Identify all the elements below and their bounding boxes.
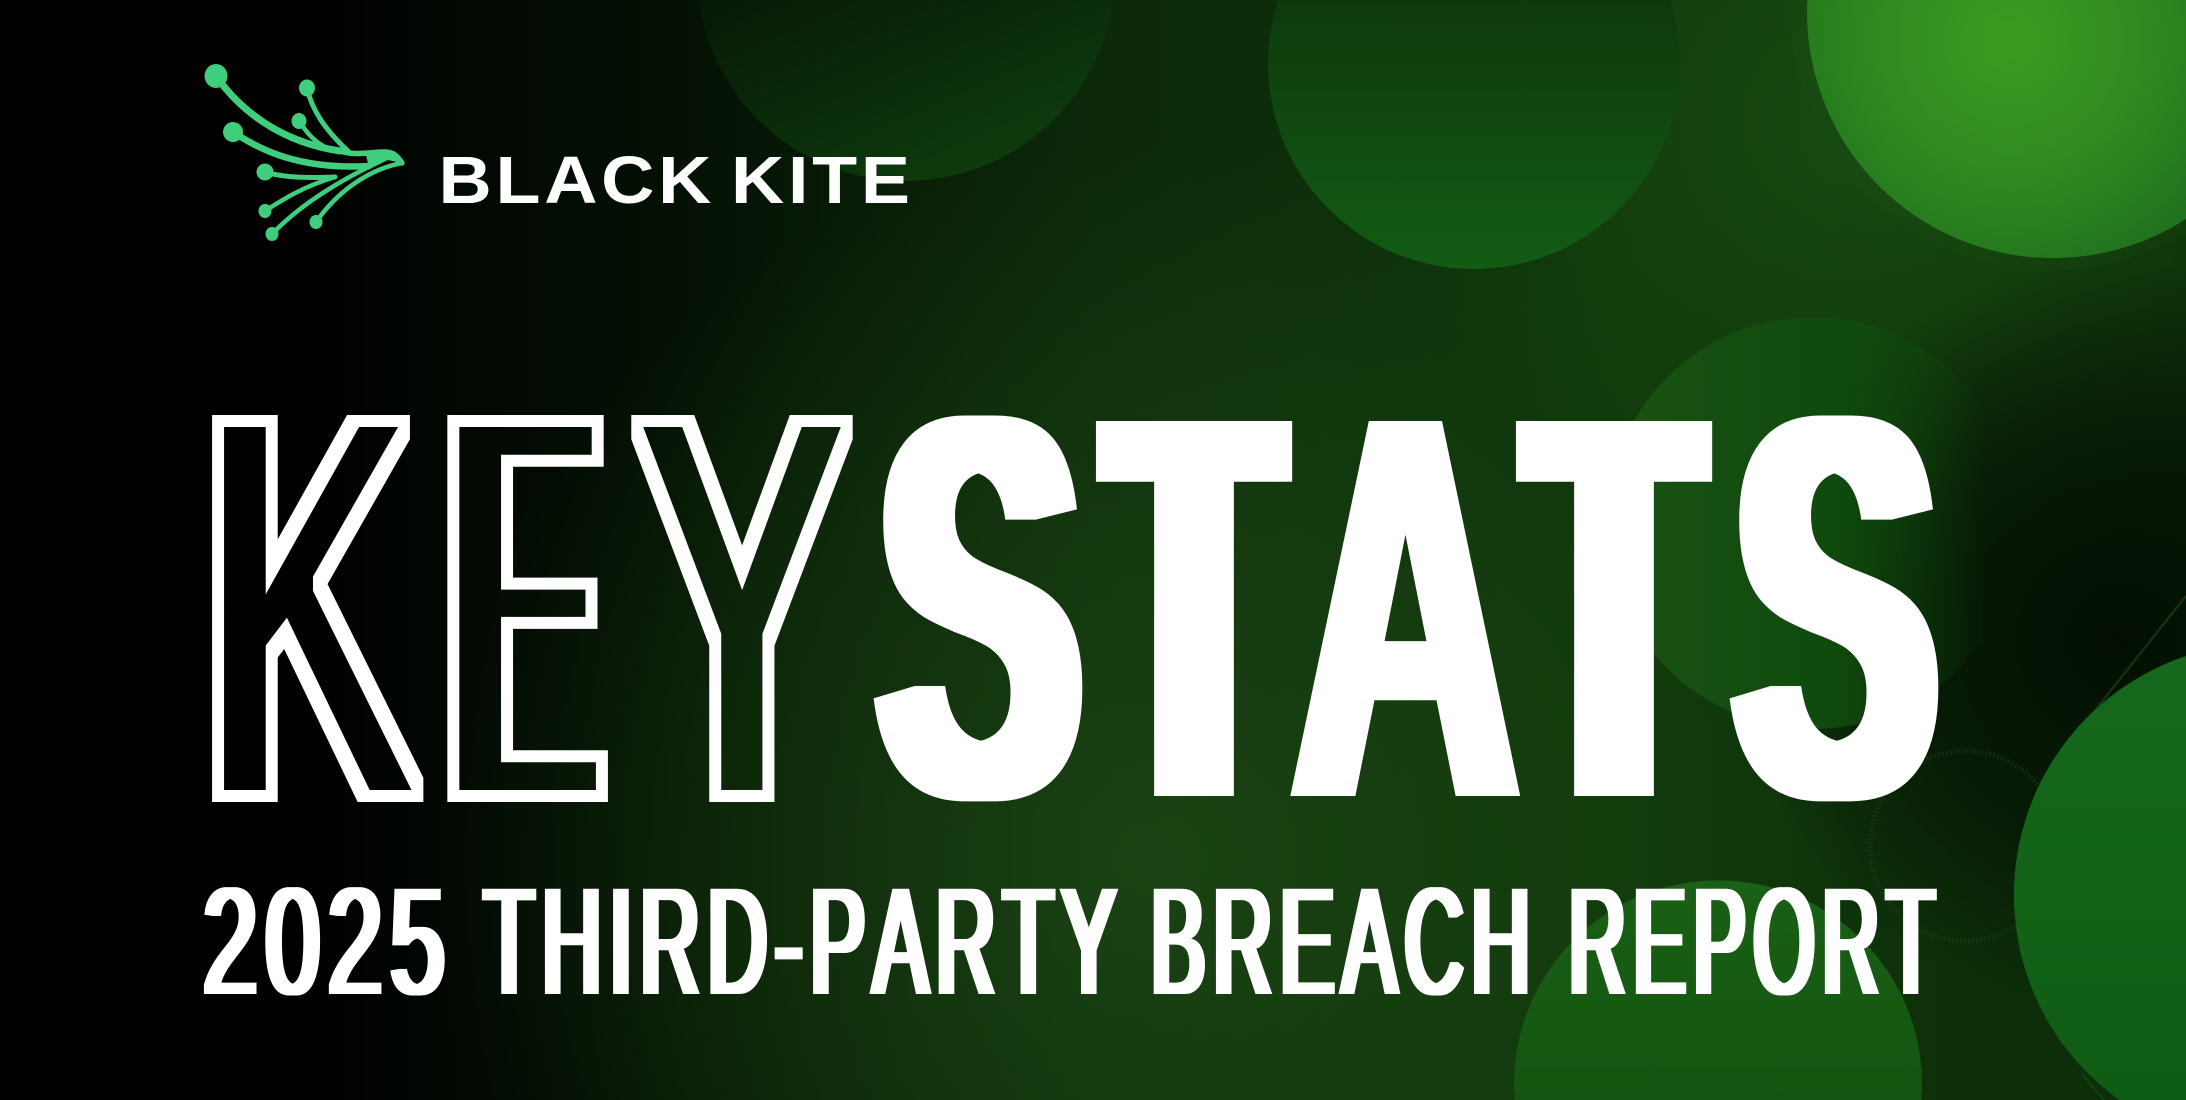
outlined word: KEY: E [453, 302, 594, 914]
subtitle: 2025 Third-Party Breach Report: BREACH [1151, 855, 1538, 1026]
solid word: STATS: S [880, 304, 1079, 912]
outlined word: KEY [204, 302, 847, 914]
wordmark: BLACK [438, 142, 715, 217]
solid word: STATS: T [1114, 304, 1274, 912]
subtitle: 2025 Third-Party Breach Report: 2025 [203, 857, 453, 1027]
wordmark [438, 142, 914, 217]
solid word: STATS: T [1534, 304, 1694, 912]
solid word: STATS: A [1292, 304, 1518, 912]
solid word: STATS [880, 304, 1935, 912]
subtitle: 2025 Third-Party Breach Report [203, 855, 1943, 1028]
subtitle: 2025 Third-Party Breach Report: THIRD-PARTY [484, 857, 1124, 1028]
subtitle: 2025 Third-Party Breach Report: REPORT [1569, 855, 1943, 1027]
wordmark: KITE [731, 142, 914, 217]
title: KEY STATS [204, 302, 1935, 914]
outlined word: KEY: K [204, 302, 416, 914]
outlined word: KEY: Y [637, 302, 847, 914]
decorative green circles [699, 0, 2186, 1100]
solid word: STATS: S [1736, 304, 1935, 912]
logo: Black Kite [204, 64, 914, 241]
icon: kite bird [204, 64, 402, 241]
